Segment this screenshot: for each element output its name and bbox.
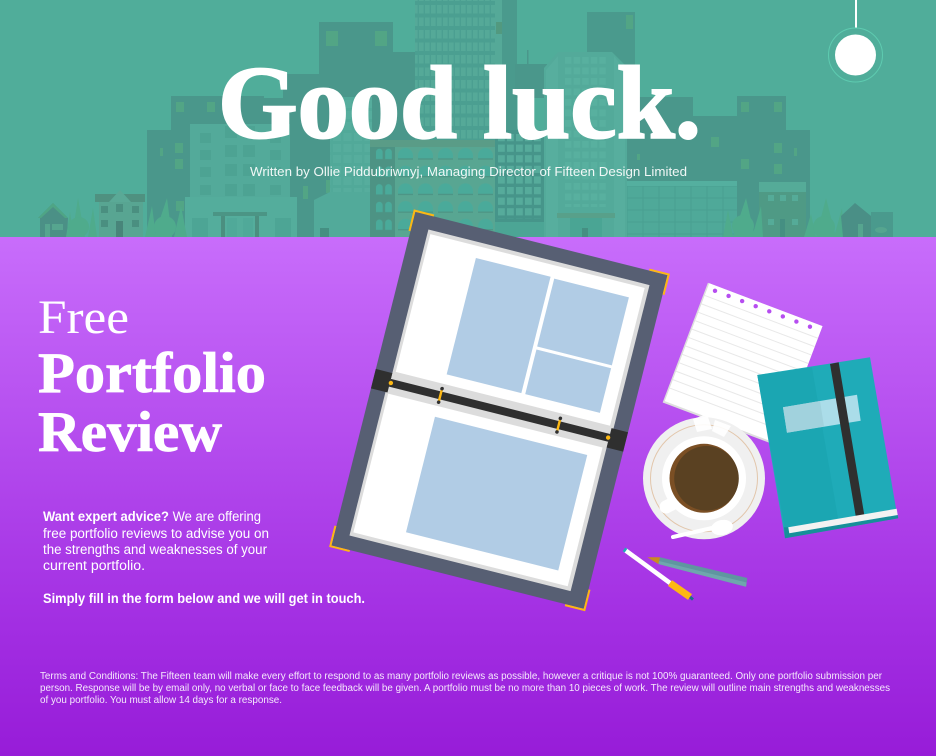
building: light window block bbox=[314, 97, 372, 237]
house: left cottage bbox=[38, 203, 68, 237]
building: brown terrace house bbox=[759, 182, 806, 237]
panel: teal sky header bbox=[0, 0, 936, 238]
text block: terms and conditions: of you portfolio. You must allow 14 days for a response. bbox=[40, 695, 282, 706]
trees: right clusters bbox=[723, 198, 844, 238]
heading: Free Portfolio Review: Portfolio bbox=[38, 342, 266, 405]
text block: terms and conditions: person. Response will be by email only, no verbal or face to face feedback will be given. A portfolio must be no more than 10 pieces of work. The review will outline main strengths and weaknesses bbox=[40, 683, 890, 694]
illustration: coffee cup on saucer bbox=[643, 414, 765, 539]
gold corner clips bbox=[330, 211, 669, 610]
byline: Written by Ollie Piddubriwnyj, Managing Director of Fifteen Design Limited bbox=[250, 164, 687, 179]
building: light block with square windows bbox=[190, 124, 290, 237]
building: dark left silhouette bbox=[147, 22, 415, 237]
building: arched brick block bbox=[370, 140, 495, 237]
house: right cottage bbox=[841, 203, 893, 237]
building: central tower bbox=[415, 0, 517, 142]
portfolio cover bbox=[332, 212, 667, 609]
text block: terms and conditions bbox=[40, 671, 890, 706]
illustration: teal notebook bbox=[757, 357, 898, 538]
trees: left clusters bbox=[66, 198, 187, 238]
illustration: pen bbox=[624, 549, 693, 600]
upper page bbox=[390, 230, 650, 438]
illustration: city skyline bbox=[38, 0, 893, 238]
house: left townhouse bbox=[95, 190, 145, 237]
building: glass block bbox=[627, 181, 737, 237]
illustration: open portfolio bbox=[330, 211, 669, 610]
binder ring left bbox=[436, 386, 444, 404]
text block: offer description: free portfolio reviews to advise you on bbox=[43, 526, 269, 541]
building: dark right blocks bbox=[550, 96, 810, 237]
heading: Free Portfolio Review bbox=[38, 291, 266, 464]
text block: offer description bbox=[43, 509, 365, 606]
picture: lower right bbox=[525, 349, 611, 413]
building: square grid block bbox=[495, 130, 545, 237]
picture: tall left bbox=[447, 258, 551, 393]
picture: large lower bbox=[406, 417, 587, 570]
text block: terms and conditions: Terms and Conditions: The Fifteen team will make every effort to respond to as many portfolio reviews as possible, however a critique is not 100% guaranteed. Only one portfolio submission per bbox=[40, 671, 883, 682]
lower page bbox=[349, 382, 609, 591]
binding strap bbox=[371, 369, 628, 452]
heading: Good luck.: luck. bbox=[483, 46, 701, 160]
text block: offer description: the strengths and weaknesses of your bbox=[43, 542, 267, 557]
icon: hanging pendant light bbox=[828, 0, 882, 82]
text block: offer description: Want expert advice? We are offering bbox=[43, 509, 261, 524]
heading: Free Portfolio Review: Review bbox=[38, 401, 222, 464]
heading: Good luck.: Good bbox=[218, 46, 457, 160]
illustration: pencil bbox=[647, 557, 747, 587]
heading: Free Portfolio Review: Free bbox=[38, 291, 129, 344]
picture: upper right bbox=[537, 279, 629, 365]
building: upper right tower bbox=[587, 12, 635, 132]
illustration: lined notepad bbox=[663, 283, 822, 446]
building: rooftop antenna block bbox=[515, 50, 547, 98]
building: hexagonal tower bbox=[544, 52, 627, 237]
binder ring right bbox=[555, 416, 563, 434]
building: low lobby with canopy bbox=[185, 197, 297, 237]
text block: offer description: Simply fill in the form below and we will get in touch. bbox=[43, 591, 365, 606]
text block: offer description: current portfolio. bbox=[43, 558, 145, 573]
panel: purple gradient section bbox=[0, 237, 936, 756]
